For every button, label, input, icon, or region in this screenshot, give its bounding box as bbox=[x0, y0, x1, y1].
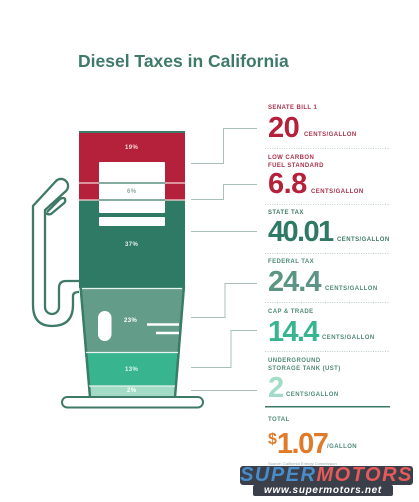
value: 2: 2 bbox=[268, 372, 284, 404]
value: total $1.07: $1.07 bbox=[268, 428, 327, 460]
unit: CENTS/GALLON bbox=[304, 132, 357, 138]
pump body outline lower bbox=[80, 286, 184, 397]
percent: 13%: 13% bbox=[125, 367, 138, 373]
label: underground storage tank: STORAGE TANK (UST) bbox=[268, 366, 341, 372]
top border bbox=[79, 131, 185, 133]
gauge window bbox=[98, 311, 112, 341]
label: low carbon fuel standard: LOW CARBON bbox=[268, 155, 314, 161]
total rule bbox=[265, 406, 390, 408]
label: underground storage tank: UNDERGROUND bbox=[268, 358, 321, 364]
label: underground storage tank bbox=[268, 358, 341, 372]
unit: CENTS/GALLON bbox=[325, 286, 378, 292]
value: 20: 20 bbox=[268, 112, 299, 144]
percent: 23%: 23% bbox=[124, 318, 137, 324]
percent: 6%: 6% bbox=[127, 189, 136, 195]
gauge lines bbox=[147, 324, 179, 333]
unit: CENTS/GALLON bbox=[286, 392, 339, 398]
label: low carbon fuel standard: FUEL STANDARD bbox=[268, 162, 324, 168]
dotted dividers bbox=[265, 148, 390, 352]
window bbox=[99, 162, 165, 226]
segment: 13% bbox=[85, 353, 179, 386]
watermark url: www.supermotors.net bbox=[264, 485, 382, 496]
source note: Source: California Energy Commission bbox=[268, 461, 337, 466]
label: state tax: STATE TAX bbox=[268, 210, 304, 216]
value: 40.01: 40.01 bbox=[268, 216, 333, 248]
value: 6.8: 6.8 bbox=[268, 168, 307, 200]
divider lines bbox=[82, 288, 182, 386]
unit: CENTS/GALLON bbox=[311, 189, 364, 195]
percent: 19%: 19% bbox=[125, 145, 138, 151]
value: 14.4: 14.4 bbox=[268, 316, 318, 348]
label: total: TOTAL bbox=[268, 417, 290, 423]
label: cap and trade: CAP & TRADE bbox=[268, 309, 314, 315]
connector lines bbox=[191, 128, 257, 390]
title: Diesel Taxes in California bbox=[78, 51, 289, 71]
pump middle: green section bbox=[79, 200, 185, 288]
unit: CENTS/GALLON bbox=[337, 237, 390, 243]
label: low carbon fuel standard bbox=[268, 154, 324, 168]
base bbox=[62, 397, 203, 408]
percent: 2%: 2% bbox=[127, 388, 136, 394]
nozzle and hose bbox=[33, 179, 79, 326]
window bands bbox=[79, 183, 185, 200]
percent: 37%: 37% bbox=[125, 242, 138, 248]
segment: 2% bbox=[88, 386, 176, 397]
unit: CENTS/GALLON bbox=[322, 335, 375, 341]
value: 24.4: 24.4 bbox=[268, 266, 320, 298]
segment: 23% bbox=[80, 288, 184, 353]
watermark logo: SUPERMOTORS bbox=[240, 464, 413, 486]
label: senate bill 1: SENATE BILL 1 bbox=[268, 105, 317, 111]
watermark bbox=[240, 464, 413, 496]
unit: /GALLON bbox=[327, 444, 357, 450]
pump top: red section bbox=[79, 131, 185, 200]
label: federal tax: FEDERAL TAX bbox=[268, 259, 314, 265]
